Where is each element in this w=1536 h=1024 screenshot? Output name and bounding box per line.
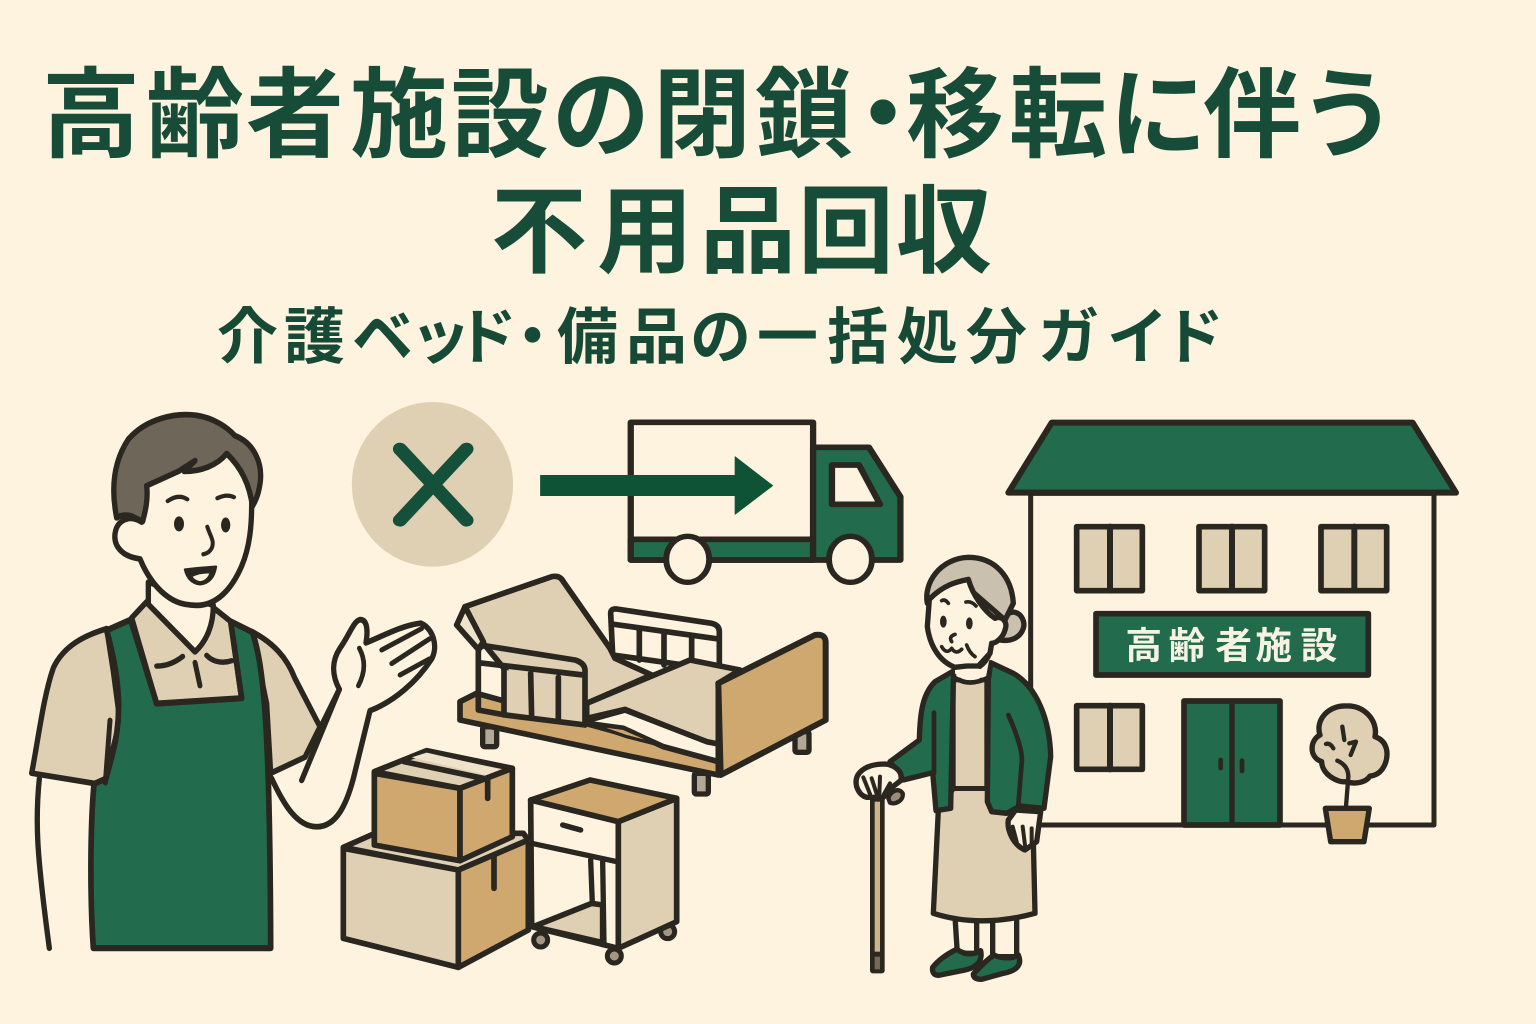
man mouth — [185, 567, 216, 584]
left cardigan sleeve and front — [890, 671, 954, 811]
drawer and inner legs — [532, 825, 617, 945]
title — [42, 60, 1397, 286]
window 1 — [1077, 527, 1142, 591]
title line 1: 高齢者施設の閉鎖・移転に伴う — [42, 60, 1397, 170]
roof — [1008, 423, 1456, 493]
right cardigan — [987, 663, 1051, 813]
upper box — [374, 751, 512, 861]
woman brows nose mouth wrinkles — [942, 600, 976, 657]
forearm line over sleeve — [302, 689, 339, 780]
neck — [953, 647, 992, 681]
window 2 — [1199, 527, 1265, 591]
man brows and nose — [168, 496, 234, 554]
door — [1184, 701, 1280, 825]
cane — [870, 797, 885, 973]
skirt — [933, 788, 1035, 921]
man right sleeve — [252, 631, 320, 773]
cabinet wheels — [534, 925, 675, 963]
right hand — [1008, 810, 1041, 850]
man left sleeve — [32, 629, 120, 785]
cabinet top — [531, 780, 677, 822]
lower mattress — [587, 660, 740, 762]
blouse — [953, 680, 987, 788]
sign — [1096, 614, 1368, 675]
man left arm — [37, 779, 49, 948]
arrow — [540, 457, 773, 514]
cardboard boxes — [343, 751, 528, 967]
truck window — [832, 465, 880, 504]
window 3 — [1321, 527, 1387, 591]
cane hand knob — [888, 790, 903, 803]
man hair — [114, 415, 261, 521]
collar tips and placket — [157, 655, 232, 686]
title line 2: 不用品回収 — [491, 179, 992, 286]
hair bun — [1000, 612, 1024, 640]
truck wheels — [666, 536, 872, 582]
woman hair — [927, 557, 1013, 620]
woman face — [927, 579, 1006, 667]
man eyes — [174, 516, 230, 532]
sleeve seam — [105, 720, 110, 783]
cabinet shelf — [533, 903, 603, 943]
apron — [91, 620, 271, 948]
subtitle: 介護ベッド・備品の一括処分ガイド — [217, 303, 1224, 371]
sign: 高齢者施設 — [1125, 625, 1337, 666]
truck cab — [813, 447, 900, 560]
no-symbol circle — [352, 402, 513, 567]
jaw line — [980, 653, 990, 667]
shoes — [933, 949, 1020, 979]
bedside cabinet — [531, 780, 677, 963]
far bed rail — [611, 609, 719, 670]
building wall — [1031, 493, 1434, 825]
neckline — [956, 678, 987, 682]
cabinet side — [618, 798, 677, 948]
front bed rail — [478, 646, 585, 725]
care bed — [457, 576, 826, 794]
truck chassis band — [631, 539, 813, 560]
bed frame — [460, 693, 718, 775]
woman eyes — [940, 616, 973, 629]
legs — [955, 917, 1017, 957]
elderly woman with cane — [856, 557, 1051, 979]
shirt front — [132, 602, 242, 704]
lower box — [343, 833, 528, 967]
left hand — [856, 764, 901, 797]
neck and collar V — [148, 582, 213, 652]
man right arm and hand — [267, 620, 435, 827]
delivery truck with arrow — [352, 402, 900, 582]
backrest mattress — [457, 576, 652, 703]
man face and ear — [115, 457, 252, 605]
bed legs — [483, 727, 809, 794]
potted plant — [1312, 706, 1387, 842]
truck cargo box — [631, 422, 813, 560]
building — [1008, 423, 1456, 842]
man in apron — [32, 415, 435, 948]
cabinet front — [531, 800, 618, 948]
window 4 — [1077, 706, 1142, 769]
footboard — [718, 635, 826, 775]
